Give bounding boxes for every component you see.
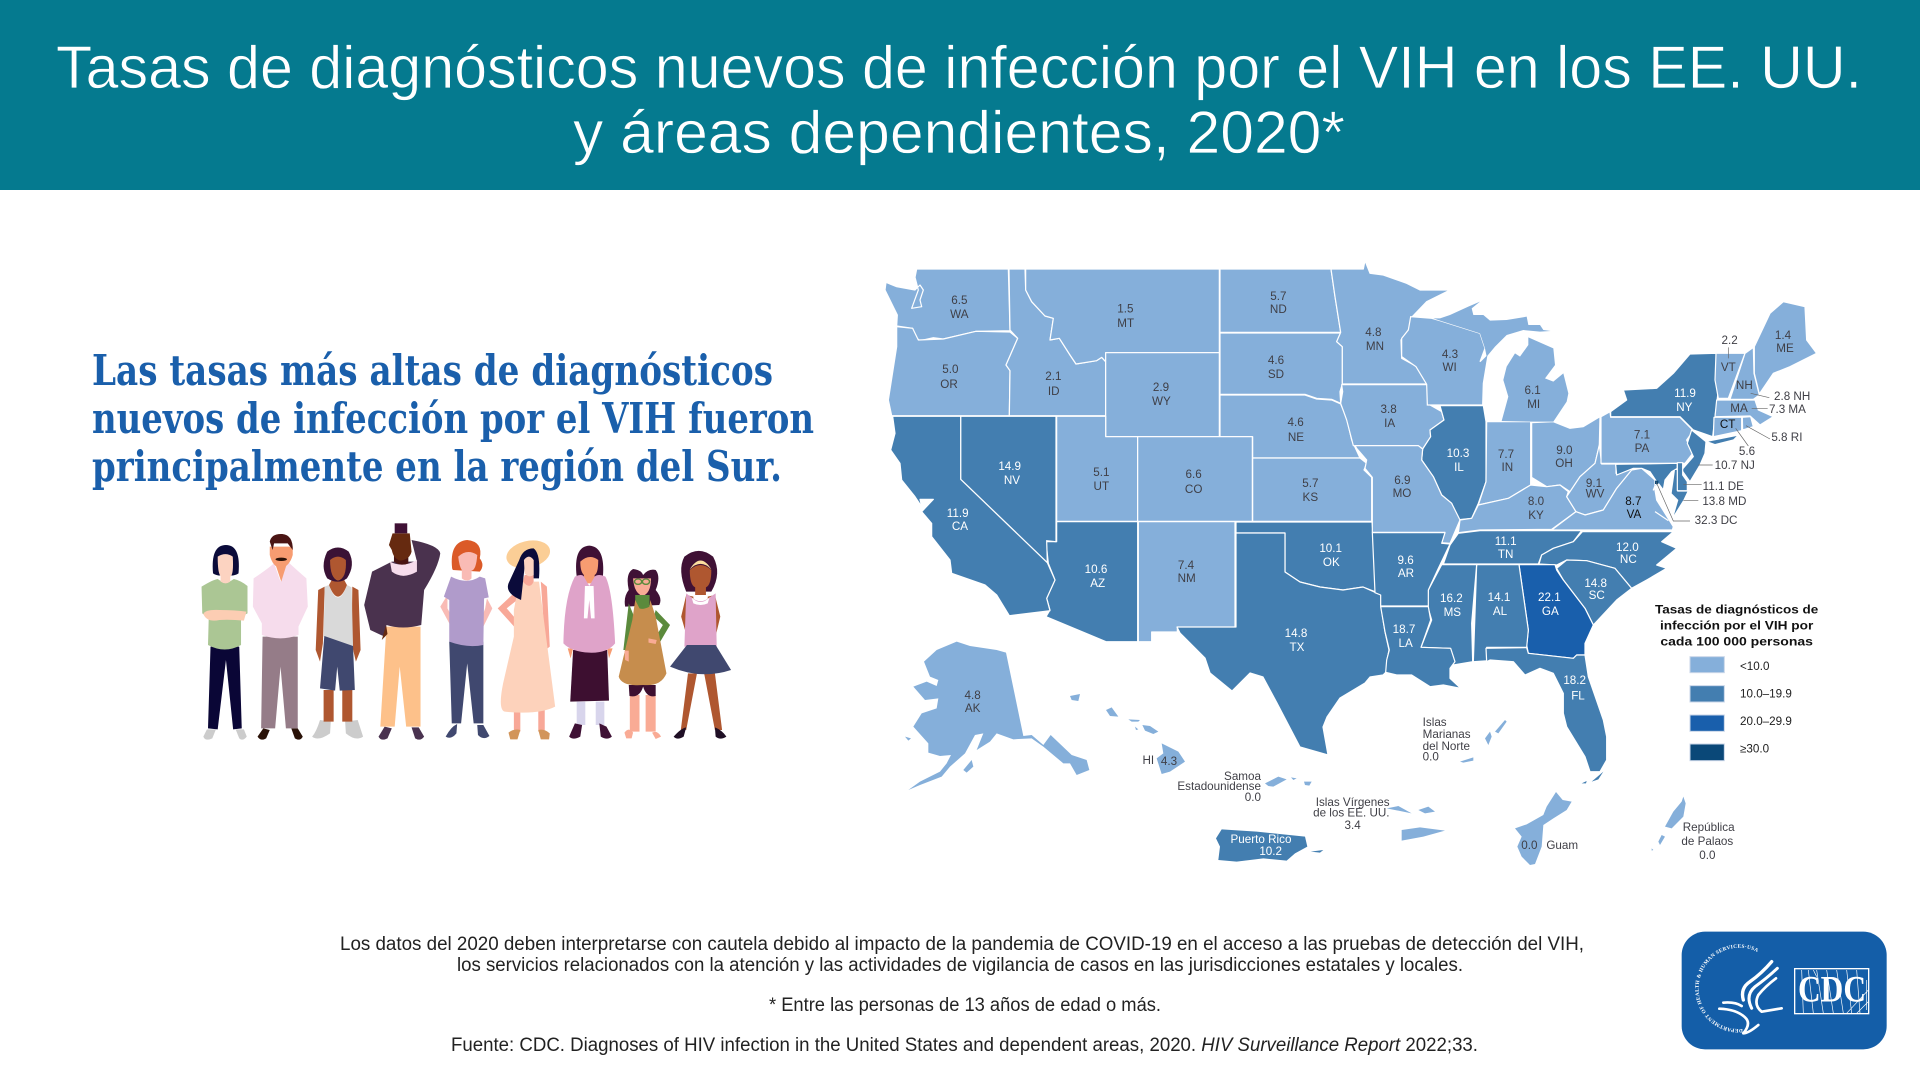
western state labels: 7.4 [1178, 559, 1195, 572]
eastern state labels: WV [1586, 488, 1605, 501]
territory labels west: 0.0 [1245, 791, 1261, 804]
territory labels east: 0.0 [1699, 849, 1716, 862]
title [56, 34, 1862, 166]
Wisconsin [1402, 317, 1488, 405]
eastern state labels: KY [1528, 509, 1544, 522]
eastern state labels: GA [1542, 605, 1559, 618]
legend title: infección por el VIH por [1660, 618, 1814, 632]
eastern state labels: IL [1454, 461, 1464, 474]
Hawaii [1070, 694, 1185, 774]
eastern state labels: 9.0 [1556, 444, 1573, 457]
legend labels: 10.0–19.9 [1740, 687, 1792, 700]
legend title: Tasas de diagnósticos de [1655, 602, 1819, 616]
small-state callouts with leader lines: 7.3 MA [1769, 403, 1806, 416]
territory labels west: AK [965, 702, 981, 715]
small-state callouts with leader lines: 2.8 NH [1774, 390, 1810, 403]
territory labels east: Marianas [1423, 728, 1471, 741]
eastern state labels: LA [1399, 637, 1413, 650]
eastern state labels: 6.1 [1525, 384, 1541, 397]
eastern state labels: 16.2 [1440, 592, 1463, 605]
western state labels: 6.5 [951, 294, 967, 307]
eastern state labels: 18.7 [1393, 623, 1415, 636]
heading: key message: nuevos de infección por el VIH fueron [92, 394, 814, 443]
territory labels west: 4.8 [965, 689, 981, 702]
footnotes: Fuente: CDC. Diagnoses of HIV infection in the United States and dependent areas, 2020. HIV Surveillance Report 2022;33. [451, 1035, 1478, 1056]
territory labels west: Puerto Rico [1231, 833, 1291, 846]
person 5: purple t-shirt [440, 540, 492, 738]
heading: key message: principalmente en la región del Sur. [92, 442, 782, 491]
person 7: pink hoodie [563, 546, 615, 739]
eastern state labels: 9.6 [1398, 554, 1414, 567]
western state labels: KS [1303, 491, 1318, 504]
western state labels: SD [1268, 368, 1284, 381]
footnotes: los servicios relacionados con la atención y las actividades de vigilancia de casos en las jurisdicciones estatales y locales. [457, 955, 1463, 976]
illustration: group of nine people [202, 523, 731, 740]
eastern state labels: 11.1 [1495, 535, 1517, 548]
western state labels: 10.6 [1085, 563, 1107, 576]
heading: key message: Las tasas más altas de diagnósticos [92, 346, 773, 395]
eastern state labels: 4.3 [1442, 348, 1458, 361]
territory labels east: 18.2 [1563, 674, 1586, 687]
American Samoa [1265, 777, 1312, 787]
person 2: pink shirt [253, 534, 308, 740]
western state labels: WY [1152, 395, 1171, 408]
eastern state labels: WI [1443, 361, 1457, 374]
eastern state labels: 22.1 [1538, 591, 1561, 604]
legend [1655, 602, 1819, 761]
territory labels west: 3.4 [1345, 819, 1361, 832]
eastern state labels: MN [1366, 340, 1384, 353]
western state labels: OK [1323, 556, 1340, 569]
territory labels east: 0.0 [1521, 839, 1538, 852]
eastern state labels: VT [1721, 361, 1736, 374]
Michigan lower peninsula [1502, 337, 1568, 422]
person 3: grey tank top [312, 547, 363, 739]
Puerto Rico [1216, 829, 1323, 862]
legend labels: <10.0 [1740, 660, 1770, 673]
territory labels east: Guam [1546, 839, 1578, 852]
eastern state labels: 14.1 [1488, 591, 1510, 604]
western state labels: 4.6 [1288, 416, 1304, 429]
heading: key message [92, 346, 814, 491]
eastern state labels: 1.4 [1775, 329, 1792, 342]
western state labels: NM [1178, 572, 1196, 585]
small-state callouts with leader lines [1656, 347, 1810, 527]
eastern state labels: 6.9 [1394, 474, 1410, 487]
territory labels east: 0.0 [1423, 751, 1439, 764]
eastern state labels: PA [1635, 442, 1650, 455]
small-state callouts with leader lines: 10.7 NJ [1715, 459, 1755, 472]
western state labels: 5.7 [1270, 290, 1286, 303]
western state labels: 1.5 [1117, 302, 1133, 315]
western state labels: ND [1270, 303, 1287, 316]
states: western group [885, 269, 1372, 642]
western state labels: OR [940, 378, 958, 391]
logo: HHS and CDC [1682, 932, 1887, 1050]
eastern state labels: 14.8 [1584, 577, 1607, 590]
footnotes: * Entre las personas de 13 años de edad o más. [769, 995, 1161, 1016]
eastern state labels: 2.2 [1722, 334, 1738, 347]
western state labels: 14.8 [1285, 627, 1307, 640]
eastern state labels: MI [1527, 398, 1540, 411]
eastern state labels: 3.8 [1381, 403, 1397, 416]
Michigan upper peninsula [1433, 302, 1551, 357]
eastern state labels: NC [1620, 553, 1637, 566]
CDC wordmark: CDC [1798, 969, 1866, 1010]
western state labels: WA [950, 308, 969, 321]
person 6: dress and sun hat [498, 536, 555, 739]
eastern state labels: CT [1720, 418, 1735, 431]
western state labels: 2.9 [1153, 381, 1169, 394]
legend labels [1740, 660, 1792, 755]
western state labels: UT [1094, 480, 1109, 493]
territory labels west [965, 689, 1390, 858]
territory labels east: FL [1571, 690, 1585, 703]
eastern state labels: 8.0 [1528, 495, 1545, 508]
legend title [1655, 602, 1819, 648]
Northern Mariana Islands [1460, 720, 1507, 763]
legend title: cada 100 000 personas [1660, 634, 1813, 648]
legend labels: 20.0–29.9 [1740, 715, 1792, 728]
western state labels: CA [952, 520, 968, 533]
western state labels: AZ [1090, 577, 1105, 590]
legend labels: ≥30.0 [1740, 742, 1770, 755]
Palau [1652, 797, 1686, 851]
US Virgin Islands [1387, 806, 1445, 841]
small-state callouts with leader lines: 11.1 DE [1703, 480, 1744, 493]
territory labels east [1423, 674, 1735, 862]
eastern state labels: TN [1498, 548, 1513, 561]
eastern state labels: VA [1627, 508, 1642, 521]
states: Oklahoma and Texas [1177, 522, 1389, 755]
territory labels west: 4.3 [1161, 755, 1177, 768]
states: eastern group [1331, 261, 1817, 688]
eastern state labels: 11.9 [1674, 387, 1696, 400]
eastern state labels: 12.0 [1616, 541, 1639, 554]
western state labels: NE [1288, 431, 1304, 444]
eastern state labels: MA [1730, 402, 1748, 415]
eastern state labels: 7.1 [1634, 428, 1650, 441]
western state labels [940, 290, 1342, 654]
eastern state labels: MS [1444, 606, 1461, 619]
western state labels: 5.1 [1093, 466, 1109, 479]
territory labels east: República [1683, 821, 1735, 834]
footnotes [340, 934, 1584, 1056]
Guam [1515, 792, 1572, 865]
eastern state labels: IA [1384, 417, 1395, 430]
eastern state labels: AR [1398, 567, 1414, 580]
eastern state labels: 7.7 [1498, 448, 1514, 461]
western state labels: 5.0 [942, 363, 959, 376]
person 9: pink top and blue skirt [670, 551, 731, 739]
legend swatches [1690, 657, 1724, 761]
western state labels: NV [1004, 474, 1020, 487]
eastern state labels: 8.7 [1625, 495, 1641, 508]
inset: Hawaii, Samoa, Puerto Rico [1070, 694, 1323, 862]
territory labels west: Estadounidense [1177, 780, 1261, 793]
western state labels: 14.9 [998, 460, 1021, 473]
territory labels west: Islas Vírgenes [1316, 796, 1390, 809]
eastern state labels: ME [1776, 342, 1794, 355]
eastern state labels: IN [1502, 461, 1513, 474]
eastern state labels: NY [1676, 401, 1693, 414]
territory labels west: HI [1143, 754, 1154, 767]
eastern state labels: 4.8 [1365, 326, 1381, 339]
territory labels west: Samoa [1224, 770, 1262, 783]
western state labels: 10.1 [1319, 542, 1342, 555]
territory labels east: de Palaos [1681, 835, 1733, 848]
territory labels east: del Norte [1423, 740, 1470, 753]
eastern state labels: SC [1589, 589, 1605, 602]
small-state callouts with leader lines: 13.8 MD [1702, 495, 1746, 508]
eastern state labels: MO [1393, 487, 1411, 500]
person 4: arm raised behind head [364, 523, 440, 740]
eastern state labels: OH [1555, 457, 1573, 470]
eastern state labels: AL [1493, 605, 1508, 618]
states: Wisconsin and Michigan [1402, 302, 1568, 422]
western state labels: 5.7 [1302, 477, 1318, 490]
state: Florida [1486, 648, 1607, 783]
western state labels: 4.6 [1268, 354, 1284, 367]
western state labels: 11.9 [947, 507, 969, 520]
title: y áreas dependientes, 2020* [573, 99, 1345, 166]
small-state callouts with leader lines: 5.6 [1739, 445, 1755, 458]
western state labels: 6.6 [1186, 468, 1202, 481]
header band [0, 0, 1920, 190]
western state labels: CO [1185, 483, 1202, 496]
small-state callouts with leader lines: 5.8 RI [1771, 431, 1802, 444]
territory labels west: 10.2 [1259, 845, 1282, 858]
map: United States rates [885, 261, 1817, 865]
person 8: glasses and apron dress [619, 569, 670, 739]
eastern state labels: 10.3 [1447, 447, 1469, 460]
eastern state labels [1365, 326, 1810, 650]
small-state callouts with leader lines: 32.3 DC [1695, 514, 1737, 527]
HHS eagle emblem: DEPARTMENT OF HEALTH & HUMAN SERVICES·USA [1695, 944, 1758, 1033]
territory labels west: de los EE. UU. [1313, 807, 1390, 820]
person 1: green shirt [202, 545, 247, 740]
eastern state labels: 9.1 [1586, 477, 1602, 490]
title: Tasas de diagnósticos nuevos de infección por el VIH en los EE. UU. [56, 34, 1862, 101]
western state labels: MT [1117, 317, 1134, 330]
western state labels: ID [1048, 385, 1059, 398]
footnotes: Los datos del 2020 deben interpretarse con cautela debido al impacto de la pandemia de COVID-19 en el acceso a las pruebas de detección del VIH, [340, 934, 1584, 955]
western state labels: TX [1290, 641, 1305, 654]
territory labels east: Islas [1423, 716, 1447, 729]
western state labels: 2.1 [1045, 370, 1061, 383]
inset: Virgin Islands, Marianas, Guam, Palau [1387, 720, 1686, 865]
eastern state labels: NH [1736, 379, 1753, 392]
inset: Alaska [905, 642, 1089, 790]
